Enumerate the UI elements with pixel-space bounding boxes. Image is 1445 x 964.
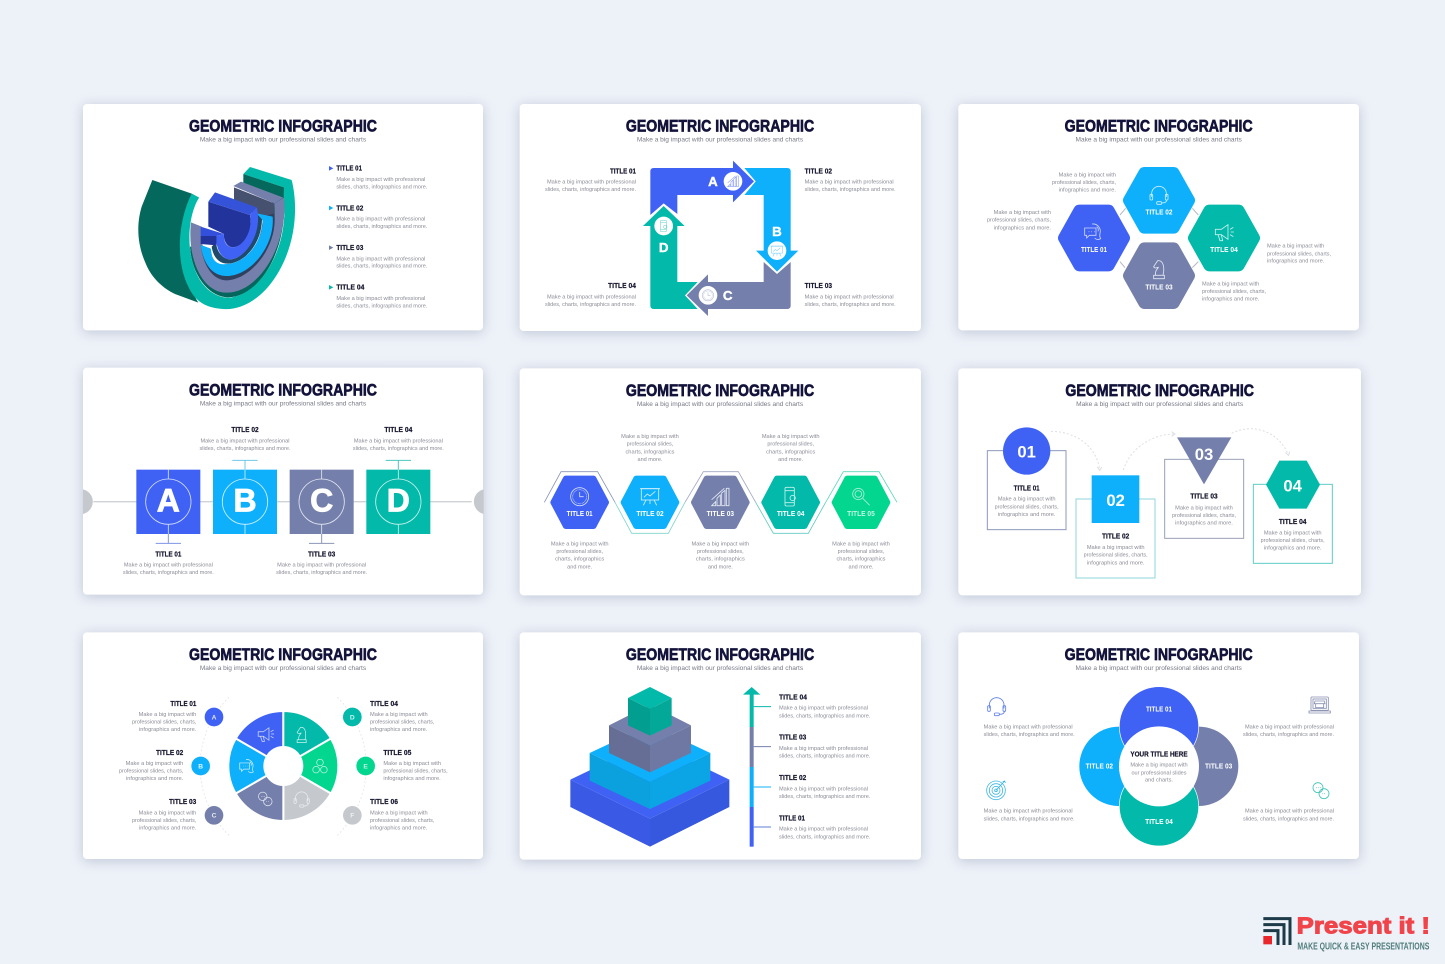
pyramid tier 1	[570, 741, 729, 847]
step 01: infographics and more.	[998, 512, 1056, 518]
step 02: infographics and more.	[1087, 560, 1145, 566]
subtitle: Make a big impact with our professional slides and charts	[200, 665, 367, 672]
text: hexagon 04 note: Make a big impact with	[1267, 244, 1324, 250]
text: hexagon 02 note: infographics and more.	[1059, 188, 1116, 194]
text: title 03: Make a big impact with professional	[805, 294, 894, 300]
badge A: A	[212, 714, 217, 721]
legend: title 01: TITLE 01	[336, 166, 362, 173]
panel: ABCD squares timeline	[83, 368, 484, 595]
text: title 01	[779, 815, 871, 840]
subtitle: Make a big impact with our professional slides and charts	[1075, 665, 1242, 672]
square D	[366, 460, 430, 534]
text: note above 04	[762, 434, 819, 463]
text: title 04: TITLE 04	[370, 701, 398, 708]
text: note above 02: charts, infographics	[625, 449, 675, 455]
icon: logo mark	[1263, 919, 1290, 945]
zigzag outline	[544, 472, 897, 533]
text: title 02: TITLE 02	[805, 168, 832, 175]
heading: GEOMETRIC INFOGRAPHIC	[626, 382, 814, 400]
icon: chat bubbles	[1313, 783, 1329, 799]
text: note above 02	[621, 434, 679, 463]
text: top left	[984, 724, 1075, 738]
center text: and charts.	[1145, 778, 1173, 784]
timeline line and end caps	[83, 489, 484, 514]
text: note below 05: Make a big impact with	[832, 541, 890, 547]
badge B: B	[198, 763, 203, 770]
text: title 05	[383, 750, 448, 782]
text: title 03	[132, 799, 197, 831]
text: hexagon 03 note	[1202, 281, 1266, 302]
text: title 04	[370, 701, 435, 733]
text: title 03: TITLE 03	[169, 799, 196, 806]
text: note below 03	[691, 541, 749, 570]
step 02: 02	[1106, 491, 1125, 510]
hexagon: title 01	[553, 478, 606, 526]
text: note below 03: and more.	[708, 564, 733, 570]
hexagon: title 04	[764, 478, 817, 526]
arrow B: B	[772, 224, 782, 239]
text: title 04	[779, 694, 871, 719]
square B	[213, 460, 277, 534]
text: note above 02: professional slides,	[627, 442, 674, 448]
center text: Make a big impact with	[1130, 763, 1188, 769]
circle labels: TITLE 02	[1086, 763, 1113, 770]
step 01: TITLE 01	[1014, 485, 1040, 492]
text: hexagon 01 note: infographics and more.	[994, 225, 1051, 231]
text: note below 01: Make a big impact with	[551, 541, 608, 547]
legend: title 02: TITLE 02	[336, 205, 363, 212]
text: title 02: TITLE 02	[156, 750, 183, 757]
text: title 03: professional slides, charts,	[132, 818, 197, 824]
square D: D	[387, 483, 410, 519]
heading: GEOMETRIC INFOGRAPHIC	[1065, 118, 1253, 136]
text: title 01	[123, 551, 214, 576]
legend: title 04	[329, 285, 428, 309]
text: note below 01: and more.	[567, 564, 593, 570]
text: title 04: Make a big impact with	[370, 712, 428, 718]
text: hexagon 02 note: Make a big impact with	[1059, 172, 1116, 178]
text: title 03: Make a big impact with	[139, 810, 196, 816]
text: title 04: Make a big impact with professional	[547, 294, 636, 300]
text: title 03: Make a big impact with professional	[277, 562, 366, 568]
text: title 04: TITLE 04	[384, 427, 412, 434]
step 03	[1165, 437, 1244, 538]
legend: title 04: slides, charts, infographics and more.	[336, 303, 428, 309]
text: hexagon 04 note: infographics and more.	[1267, 259, 1325, 265]
pyramid tier 3	[609, 705, 691, 772]
donut chart	[228, 711, 338, 821]
center text: our professional slides	[1131, 770, 1187, 776]
hexagon: title 02	[1129, 173, 1189, 228]
hexagon: title 03: TITLE 03	[707, 511, 734, 518]
text: title 04: infographics and more.	[370, 727, 428, 733]
step 01	[987, 427, 1066, 530]
step 04: infographics and more.	[1264, 546, 1322, 552]
badge F	[343, 806, 362, 825]
text: hexagon 03 note: professional slides, charts,	[1202, 289, 1266, 295]
text: title 05: Make a big impact with	[383, 761, 441, 767]
text: bottom right: slides, charts, infographics and more.	[1243, 816, 1334, 822]
hexagon: title 03	[1129, 248, 1189, 303]
subtitle: Make a big impact with our professional slides and charts	[200, 400, 367, 407]
step 03: infographics and more.	[1175, 520, 1233, 526]
dashed arcs	[200, 697, 366, 835]
text: title 03: slides, charts, infographics and more.	[276, 570, 368, 576]
panel: arrow cycle	[520, 104, 921, 331]
hexagon: title 04: TITLE 04	[777, 511, 805, 518]
panel: isometric half rings	[83, 104, 483, 330]
hexagon: title 04: TITLE 04	[1210, 247, 1238, 254]
legend: title 03: slides, charts, infographics and more.	[336, 264, 428, 270]
icon: target	[987, 781, 1005, 800]
text: title 01: professional slides, charts,	[132, 720, 197, 726]
arrow A	[650, 161, 754, 215]
text: title 01: Make a big impact with	[139, 712, 196, 718]
brand name: Present it !	[1297, 912, 1430, 938]
text: note below 03: professional slides,	[697, 549, 744, 555]
text: hexagon 04 note: professional slides, charts,	[1267, 251, 1331, 257]
square C: C	[310, 483, 333, 519]
text: hexagon 02 note: professional slides, charts,	[1052, 180, 1116, 186]
text: top right: slides, charts, infographics and more.	[1243, 732, 1334, 738]
text: title 01: Make a big impact with professional	[779, 827, 868, 833]
text: title 06: TITLE 06	[370, 799, 398, 806]
text: title 03: slides, charts, infographics and more.	[779, 754, 871, 760]
badge E: E	[363, 763, 368, 770]
arrow C	[687, 262, 791, 316]
text: title 06: Make a big impact with	[370, 810, 428, 816]
text: title 04: TITLE 04	[779, 694, 807, 701]
text: title 04: slides, charts, infographics and more.	[545, 302, 636, 308]
text: title 01: infographics and more.	[139, 727, 197, 733]
text: note below 05	[832, 541, 890, 570]
arrow: 02 to 03	[1123, 432, 1175, 470]
heading: GEOMETRIC INFOGRAPHIC	[189, 646, 377, 664]
badge C: C	[212, 813, 217, 820]
legend: title 02: slides, charts, infographics and more.	[336, 224, 428, 230]
pyramid tier 4	[628, 687, 672, 736]
text: title 05: infographics and more.	[383, 776, 441, 782]
arrow: 01 to 02	[1051, 431, 1102, 470]
text: title 01: slides, charts, infographics and more.	[545, 187, 636, 193]
text: note below 03: charts, infographics	[696, 557, 745, 563]
text: title 04: Make a big impact with professional	[354, 438, 443, 444]
text: title 01: TITLE 01	[170, 701, 196, 708]
panel: six segment donut	[83, 632, 483, 859]
text: title 02: Make a big impact with	[126, 761, 183, 767]
step 01: 01	[1017, 442, 1036, 461]
panel: four hexagons	[958, 104, 1359, 330]
text: title 01: Make a big impact with professional	[124, 562, 213, 568]
legend: title 02	[329, 205, 428, 230]
text: hexagon 02 note	[1052, 172, 1116, 194]
text: title 01: slides, charts, infographics and more.	[123, 570, 214, 576]
badge F: F	[350, 813, 354, 820]
text: title 06: professional slides, charts,	[370, 818, 435, 824]
rising arrow	[743, 687, 771, 847]
text: top right: Make a big impact with professional	[1245, 724, 1334, 730]
text: note below 01	[551, 541, 608, 570]
text: title 02: Make a big impact with professional	[779, 786, 868, 792]
heading: GEOMETRIC INFOGRAPHIC	[1065, 646, 1253, 664]
text: note above 04: and more.	[778, 457, 804, 463]
text: bottom left	[984, 809, 1075, 822]
text: title 04: professional slides, charts,	[370, 720, 435, 726]
square A: A	[157, 483, 180, 519]
heading: GEOMETRIC INFOGRAPHIC	[1065, 382, 1254, 400]
badge E	[356, 757, 375, 775]
text: note below 05: and more.	[848, 564, 874, 570]
step 02: Make a big impact with	[1087, 545, 1144, 551]
square A	[136, 470, 200, 543]
step 04	[1253, 461, 1332, 563]
text: title 01: Make a big impact with professional	[547, 179, 636, 185]
text: hexagon 01 note	[987, 210, 1051, 231]
hexagon: title 04	[1194, 211, 1254, 265]
badge D	[343, 708, 362, 726]
pyramid tier 2	[590, 725, 710, 809]
text: title 03	[805, 283, 896, 308]
panel: isometric pyramid	[520, 632, 921, 860]
text: title 02	[779, 775, 871, 800]
text: bottom right: Make a big impact with professional	[1245, 809, 1334, 815]
legend: title 01: slides, charts, infographics and more.	[336, 184, 428, 190]
step 02	[1076, 475, 1155, 578]
text: note above 02: Make a big impact with	[621, 434, 679, 440]
text: title 01: TITLE 01	[779, 815, 805, 822]
text: note below 05: professional slides,	[838, 549, 885, 555]
text: title 06: infographics and more.	[370, 825, 428, 831]
step 04: 04	[1283, 476, 1303, 495]
text: note below 01: professional slides,	[556, 549, 603, 555]
legend: title 03: TITLE 03	[336, 245, 363, 252]
text: title 04: slides, charts, infographics and more.	[353, 446, 444, 452]
step 03: Make a big impact with	[1175, 505, 1233, 511]
heading: GEOMETRIC INFOGRAPHIC	[626, 118, 814, 136]
text: title 02: slides, charts, infographics and more.	[199, 446, 291, 452]
text: title 02: professional slides, charts,	[119, 769, 184, 775]
hexagon: title 02: TITLE 02	[636, 511, 664, 518]
text: bottom left: slides, charts, infographics and more.	[984, 816, 1075, 822]
panel: numbered shapes in boxes	[958, 368, 1361, 595]
badge C	[205, 806, 223, 825]
text: title 03	[276, 551, 368, 576]
text: bottom left: Make a big impact with professional	[984, 809, 1073, 815]
text: title 02: Make a big impact with professional	[200, 438, 289, 444]
text: title 01	[545, 168, 636, 193]
hexagon: title 05	[834, 478, 888, 526]
text: title 02: TITLE 02	[779, 775, 806, 782]
hexagon: title 03: TITLE 03	[1145, 285, 1173, 292]
text: title 01: TITLE 01	[155, 551, 181, 558]
arrow B	[744, 168, 798, 272]
circle labels: TITLE 03	[1205, 763, 1232, 770]
arrow D	[643, 206, 698, 309]
circle labels	[1086, 707, 1232, 826]
hexagon: title 01: TITLE 01	[1081, 247, 1107, 254]
text: title 02: TITLE 02	[231, 427, 259, 434]
step 03: TITLE 03	[1190, 494, 1218, 501]
icon: laptop	[1309, 697, 1330, 713]
text: title 05: professional slides, charts,	[383, 769, 448, 775]
legend: title 01	[329, 166, 428, 190]
text: title 02	[199, 427, 291, 452]
text: note above 04: charts, infographics	[766, 449, 815, 455]
text: title 03: Make a big impact with professional	[779, 746, 868, 752]
circle labels: TITLE 04	[1145, 819, 1173, 826]
step 04: professional slides, charts,	[1261, 538, 1325, 544]
subtitle: Make a big impact with our professional slides and charts	[200, 137, 367, 144]
step 02: TITLE 02	[1102, 534, 1129, 541]
center text: YOUR TITLE HERE	[1130, 751, 1188, 758]
text: top left: Make a big impact with professional	[984, 724, 1073, 730]
heading: GEOMETRIC INFOGRAPHIC	[626, 646, 814, 664]
text: title 01	[132, 701, 197, 733]
center text	[1130, 751, 1188, 784]
text: note below 03: Make a big impact with	[691, 541, 749, 547]
icon: headset	[988, 698, 1006, 716]
text: hexagon 04 note	[1267, 244, 1331, 265]
text: title 02: Make a big impact with professional	[805, 179, 894, 185]
step 03: professional slides, charts,	[1172, 513, 1236, 519]
text: title 02	[119, 750, 184, 782]
text: note above 04: professional slides,	[767, 442, 814, 448]
donut icons	[240, 727, 327, 807]
arrow D: D	[659, 240, 669, 255]
text: title 02	[805, 168, 896, 193]
hexagon: title 05: TITLE 05	[847, 511, 875, 518]
hexagon: title 02: TITLE 02	[1145, 209, 1173, 216]
legend: title 01: Make a big impact with professional	[336, 177, 425, 183]
step 02: professional slides, charts,	[1084, 553, 1148, 559]
hexagon: title 03	[694, 478, 747, 526]
heading: GEOMETRIC INFOGRAPHIC	[189, 381, 377, 399]
badge D: D	[350, 714, 355, 721]
text: hexagon 01 note: professional slides, charts,	[987, 218, 1051, 224]
step 03: 03	[1195, 445, 1213, 464]
circle labels: TITLE 01	[1146, 707, 1172, 714]
text: title 04: Make a big impact with professional	[779, 706, 868, 712]
text: title 01: TITLE 01	[610, 168, 636, 175]
text: title 06	[370, 799, 435, 831]
step 04: TITLE 04	[1279, 519, 1307, 526]
legend: title 02: Make a big impact with professional	[336, 217, 425, 223]
hexagon: title 01	[1064, 211, 1124, 265]
heading: GEOMETRIC INFOGRAPHIC	[189, 118, 377, 136]
venn circles	[1079, 687, 1238, 846]
hexagon: title 01: TITLE 01	[567, 511, 593, 518]
text: hexagon 03 note: infographics and more.	[1202, 296, 1260, 302]
subtitle: Make a big impact with our professional slides and charts	[1075, 137, 1242, 144]
text: title 03: infographics and more.	[139, 825, 197, 831]
text: title 02: slides, charts, infographics and more.	[805, 187, 896, 193]
arrow A: A	[708, 174, 718, 189]
badge B	[191, 757, 210, 775]
text: note below 01: charts, infographics	[555, 557, 604, 563]
text: title 01: slides, charts, infographics and more.	[779, 834, 871, 840]
text: title 03: TITLE 03	[779, 735, 806, 742]
text: hexagon 01 note: Make a big impact with	[994, 210, 1051, 216]
panel: five hexagon chain	[520, 368, 921, 595]
panel: overlapping circles	[958, 632, 1359, 859]
text: title 03	[779, 735, 871, 760]
text: title 05: TITLE 05	[383, 750, 411, 757]
subtitle: Make a big impact with our professional slides and charts	[637, 137, 804, 144]
text: title 03: TITLE 03	[805, 283, 832, 290]
badge A	[205, 708, 223, 726]
text: bottom right	[1243, 809, 1334, 822]
step 01: professional slides, charts,	[995, 504, 1059, 510]
legend: title 03	[329, 245, 428, 270]
text: note below 05: charts, infographics	[836, 557, 886, 563]
text: hexagon 03 note: Make a big impact with	[1202, 281, 1259, 287]
hexagon: title 02	[623, 478, 677, 526]
arrow: 03 to 04	[1232, 429, 1290, 455]
arrow C: C	[723, 288, 733, 303]
legend: title 03: Make a big impact with professional	[336, 256, 425, 262]
text: title 02: infographics and more.	[126, 776, 184, 782]
subtitle: Make a big impact with our professional slides and charts	[637, 665, 804, 672]
legend: title 04: Make a big impact with professional	[336, 296, 425, 302]
text: title 03: slides, charts, infographics and more.	[805, 302, 896, 308]
text: title 04	[353, 427, 444, 452]
subtitle: Make a big impact with our professional slides and charts	[637, 401, 804, 408]
text: title 02: slides, charts, infographics and more.	[779, 794, 871, 800]
square C	[290, 470, 354, 543]
step 01: Make a big impact with	[998, 497, 1055, 503]
legend: title 04: TITLE 04	[336, 285, 364, 292]
text: title 04	[545, 283, 636, 308]
text: note above 04: Make a big impact with	[762, 434, 819, 440]
text: title 03: TITLE 03	[308, 551, 335, 558]
chart: 3D concentric half rings	[138, 167, 295, 309]
text: title 04: TITLE 04	[608, 283, 636, 290]
logo: Present it	[1263, 912, 1430, 953]
text: top right	[1243, 724, 1334, 738]
subtitle: Make a big impact with our professional slides and charts	[1076, 401, 1244, 408]
text: title 04: slides, charts, infographics and more.	[779, 713, 871, 719]
text: note above 02: and more.	[637, 457, 663, 463]
text: top left: slides, charts, infographics and more.	[984, 732, 1075, 738]
square B: B	[233, 483, 257, 519]
step 04: Make a big impact with	[1264, 530, 1321, 536]
